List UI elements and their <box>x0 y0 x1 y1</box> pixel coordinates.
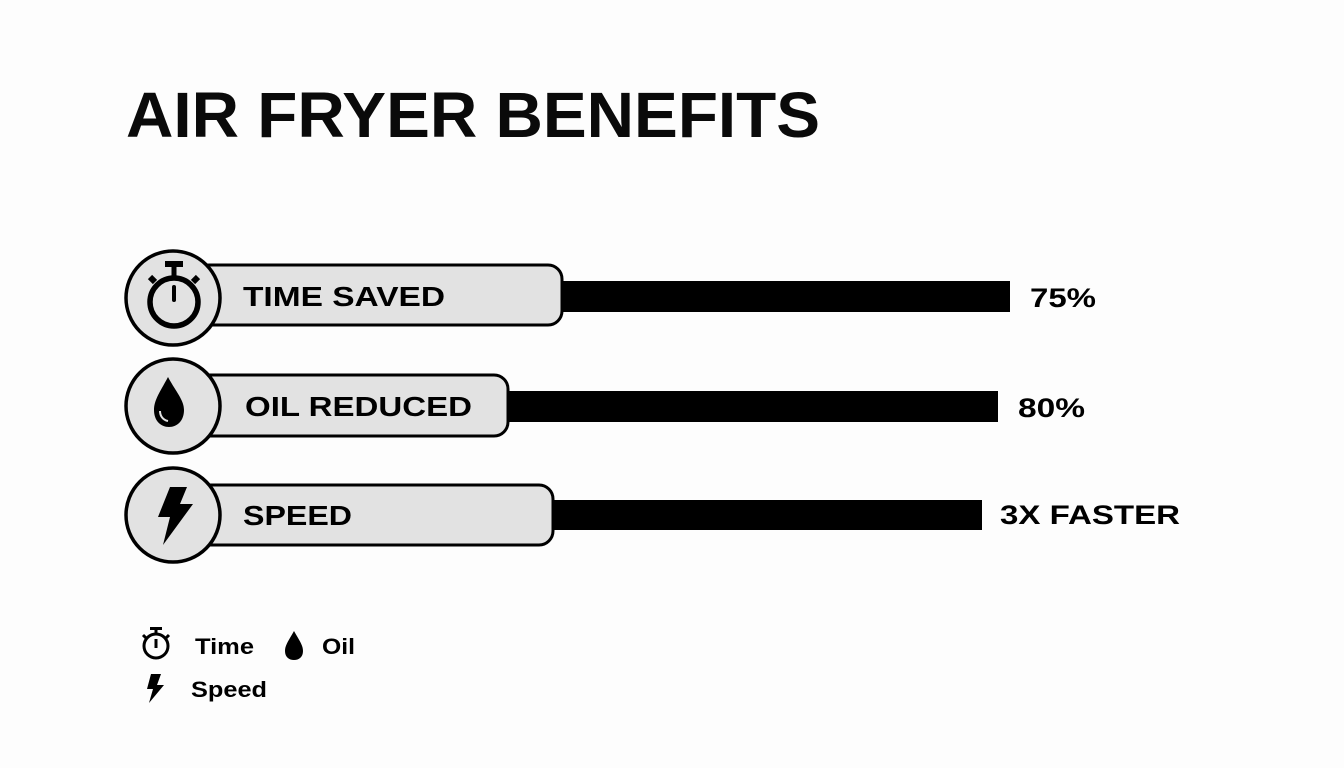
legend icon: oil drop <box>285 631 303 660</box>
bar: oil reduced <box>500 391 998 422</box>
legend icon: lightning <box>147 674 164 703</box>
row: oil reduced <box>126 359 1085 453</box>
legend text: speed: Speed <box>191 677 267 702</box>
icon: oil drop <box>126 359 220 453</box>
legend <box>143 627 355 703</box>
row: speed <box>126 468 1180 562</box>
value: 80%: 80% <box>1018 393 1085 423</box>
icon: stopwatch <box>126 251 220 345</box>
pill: time saved <box>195 265 562 325</box>
value: 3x faster: 3X FASTER <box>1000 500 1180 530</box>
bar: time saved <box>556 281 1010 312</box>
row: time saved <box>126 251 1096 345</box>
bar: speed <box>545 500 982 530</box>
value: 75%: 75% <box>1030 283 1096 313</box>
title: AIR FRYER BENEFITS <box>126 79 820 151</box>
icon: lightning <box>126 468 220 562</box>
legend text: time: Time <box>195 634 254 659</box>
pill: speed <box>195 485 553 545</box>
legend text: oil: Oil <box>322 634 355 659</box>
pill: oil reduced <box>195 375 508 436</box>
label: time saved: TIME SAVED <box>243 281 445 312</box>
label: speed: SPEED <box>243 500 352 531</box>
legend icon: stopwatch <box>143 627 169 658</box>
label: oil reduced: OIL REDUCED <box>245 391 472 422</box>
